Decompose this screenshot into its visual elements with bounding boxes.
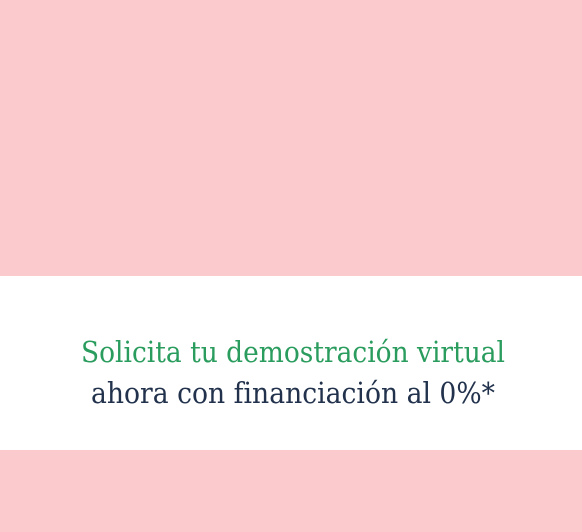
headline: green line: Solicita tu demostración virtual xyxy=(81,336,505,369)
headline: navy line: ahora con financiación al 0%* xyxy=(91,377,495,410)
bottom pink panel xyxy=(0,450,582,532)
top pink panel xyxy=(0,0,582,276)
white banner panel xyxy=(0,276,582,450)
